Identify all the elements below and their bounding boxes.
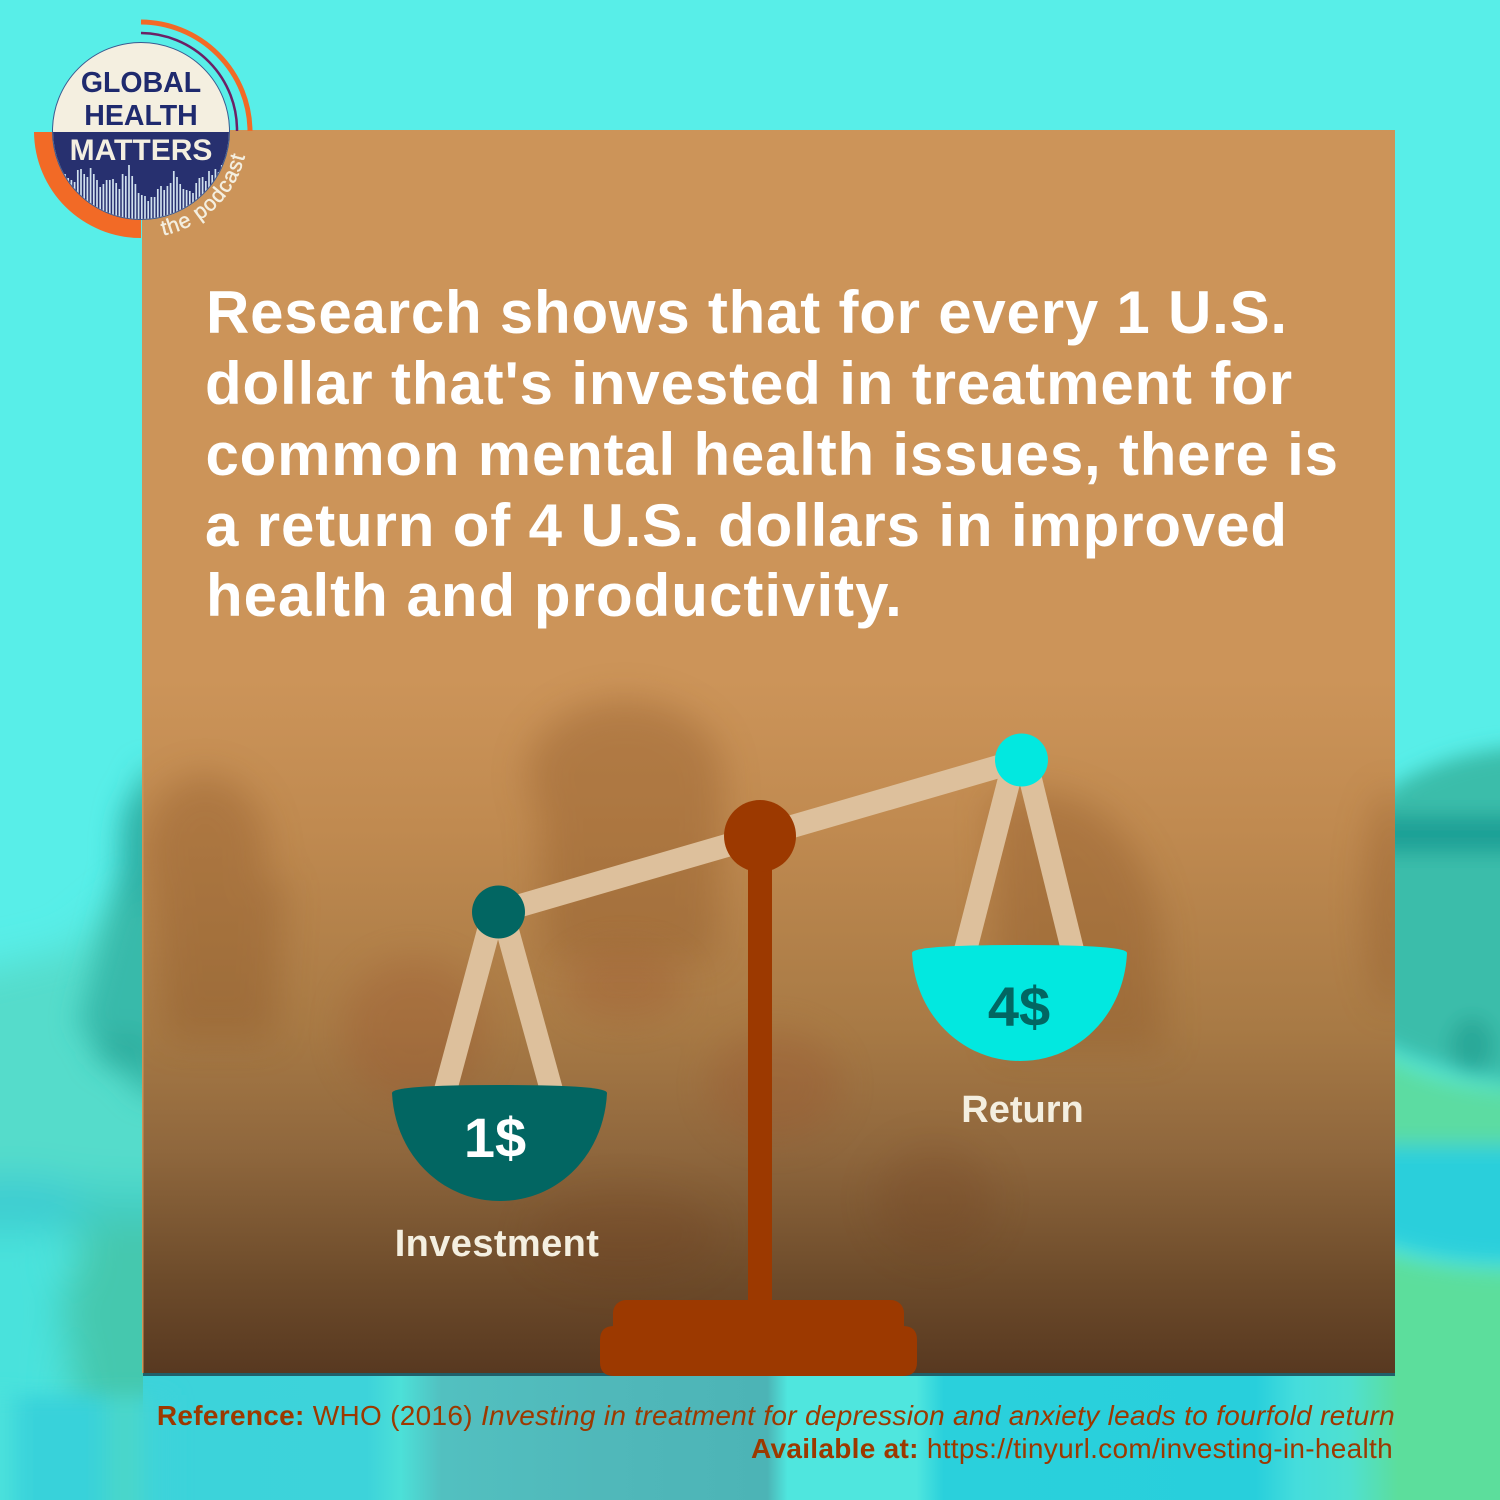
logo tagline: the podcast — [160, 153, 246, 236]
logo wordmark: HEALTH — [84, 100, 198, 132]
right pan: return — [912, 945, 1127, 1061]
balance scale chart — [392, 734, 1127, 1376]
scale base — [600, 1300, 917, 1376]
icon: roundel — [50, 42, 232, 232]
headline text block — [205, 279, 1339, 629]
scale pivot — [724, 800, 796, 872]
left joint — [472, 886, 525, 938]
reference citation: Reference: WHO (2016) Investing in treatment for depression and anxiety leads to fourfold return — [157, 1400, 1395, 1431]
bottom background strip — [143, 1376, 1500, 1500]
icon: outer arcs — [34, 22, 250, 238]
blurred silhouettes of people — [143, 699, 1414, 1050]
right pan: return: 4$ — [988, 975, 1050, 1038]
panel left edge — [142, 130, 144, 1373]
reference citation: Available at: https://tinyurl.com/investing-in-health — [751, 1433, 1393, 1464]
headline text block: Research shows that for every 1 U.S. — [206, 279, 1288, 346]
left pan: investment — [392, 1085, 607, 1201]
logo wordmark: GLOBAL — [81, 67, 201, 99]
headline text block: dollar that's invested in treatment for — [205, 350, 1293, 417]
headline text block: health and productivity. — [206, 562, 903, 629]
logo wordmark — [70, 67, 212, 167]
label: investment: Investment — [395, 1223, 599, 1265]
logo: Global Health Matters the podcast — [34, 20, 252, 238]
soundwave bars — [64, 165, 222, 219]
right joint — [995, 734, 1048, 786]
logo wordmark: MATTERS — [70, 134, 212, 167]
panel: brown photo overlay — [143, 130, 1414, 1376]
bottom left background strip — [0, 1395, 170, 1500]
scale beam — [498, 760, 1021, 912]
right hanging strings — [965, 773, 1073, 952]
label: return: Return — [961, 1089, 1084, 1131]
left hanging strings — [445, 925, 552, 1092]
headline text block: a return of 4 U.S. dollars in improved — [205, 492, 1288, 559]
reference citation — [157, 1400, 1395, 1464]
headline text block: common mental health issues, there is — [206, 421, 1339, 488]
left pan: investment: 1$ — [464, 1106, 526, 1169]
scale post — [748, 860, 772, 1305]
